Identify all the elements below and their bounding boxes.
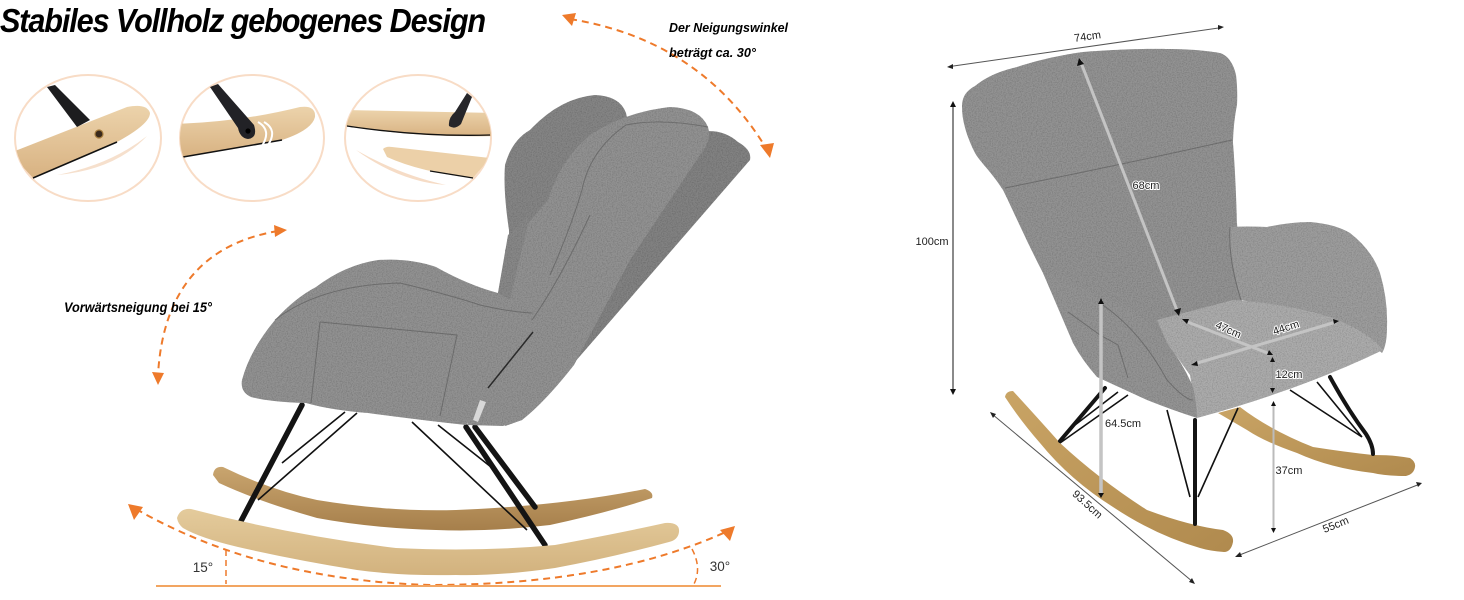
right arm [1230,222,1387,353]
arrow: forward tilt arc [152,225,287,385]
dimension: 68cm: 68cm [1133,180,1159,192]
dimension: 44cm [1191,318,1339,366]
dimension: 55cm: 55cm [1321,515,1351,536]
seat rear [495,215,530,310]
angle label 15: 15° [193,560,213,575]
dimension: 64.5cm: 64.5cm [1105,418,1141,430]
dimension: 100cm [915,101,956,395]
dimension: 68cm [1077,58,1181,316]
front rocker [177,509,679,575]
front view rocking chair [962,49,1415,552]
rear rocker [213,467,652,530]
orange base arcs and angles [128,504,735,587]
side view rocking chair [128,95,750,587]
label: forward tilt: Vorwärtsneigung bei 15° [64,299,212,315]
label: tilt angle [669,20,788,60]
metal legs [1060,377,1373,524]
near wing and back [467,107,709,426]
dimensions [915,25,1422,584]
label: tilt angle: beträgt ca. 30° [669,45,757,60]
side panel and front arm [1043,273,1197,418]
rear rocker right [1218,407,1415,476]
dimension: 47cm [1182,319,1273,355]
dimension: 44cm: 44cm [1271,318,1301,338]
seat [1157,300,1383,418]
fabric label tag [473,400,486,422]
front rocker left [1005,391,1233,552]
dimension: 74cm [947,25,1224,69]
dimension: 55cm [1235,482,1422,557]
dimension: 12cm: 12cm [1276,369,1302,381]
dimension: 37cm [1271,401,1302,533]
dimension: 37cm: 37cm [1276,465,1302,477]
dimension: 12cm [1270,357,1302,393]
side panel and arm [242,260,536,425]
legs [240,405,545,545]
dimension: 74cm: 74cm [1073,29,1102,45]
dimension: 100cm: 100cm [915,236,949,248]
rear back layer [505,131,750,426]
arrow: backward tilt arc [562,13,774,158]
upholstery [962,49,1387,418]
upholstery [242,95,750,426]
seams [1005,140,1241,400]
dimension: 64.5cm [1098,298,1141,498]
dimension: 93.5cm: 93.5cm [1070,488,1104,521]
dimension: 47cm: 47cm [1213,319,1243,341]
seams and pocket [275,122,708,416]
back [962,49,1242,350]
detail circle: rocker joint side [10,75,161,201]
detail circle: rocker joint top [175,75,324,201]
detail circle: rocker ends [345,75,495,201]
title: Stabiles Vollholz gebogenes Design [0,2,485,39]
angle label 30: 30° [710,559,730,574]
label: tilt angle: Der Neigungswinkel [669,20,788,35]
dimension: 93.5cm [990,412,1195,584]
far wing [504,95,640,300]
